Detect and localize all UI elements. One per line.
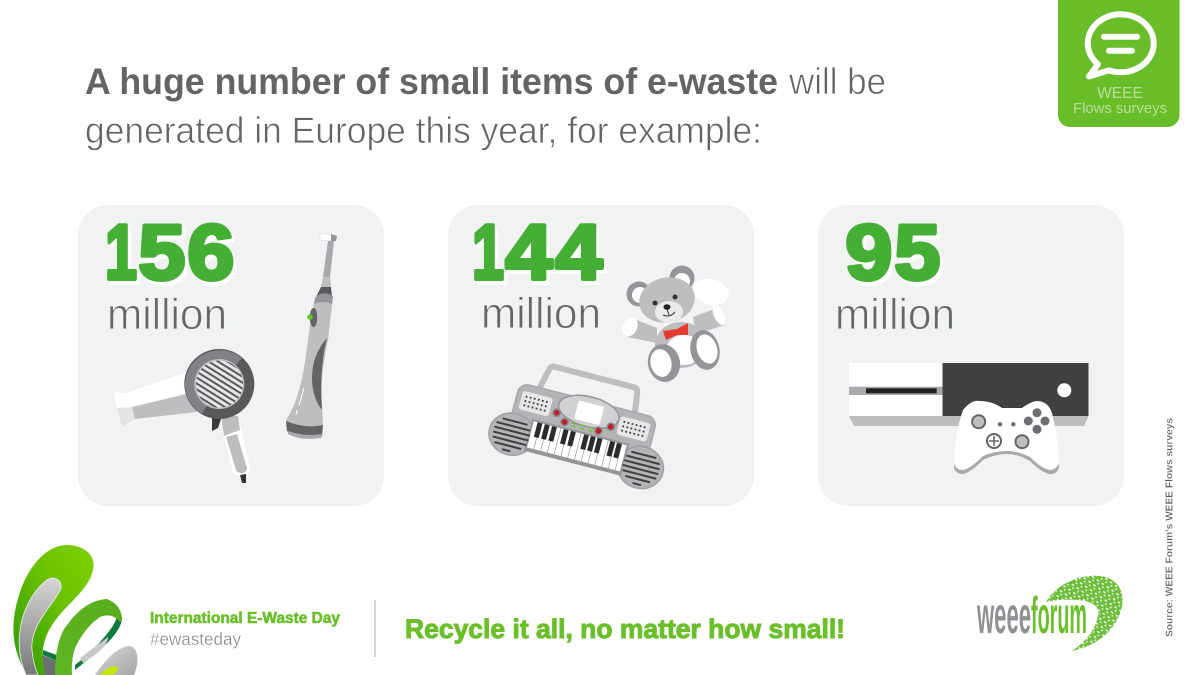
number: 156: 6 [190,212,237,300]
source note: Source: WEEE Forum's WEEE Flows surveys [1164,418,1176,637]
icon: electric toothbrush [286,233,337,439]
icon: game controller [954,401,1059,474]
number: 144: 4 [508,212,555,300]
WEEE Forum logo: weee [977,587,1031,645]
number: 95: 5 [897,212,943,300]
piano keys [527,421,627,471]
side panels [518,391,553,417]
label: million: million [481,289,601,338]
number: 156: 6 [187,208,234,296]
WEEE Forum logo: forum [1031,587,1087,645]
slogan: Recycle it all, no matter how small! [405,614,845,644]
icon: game console [849,363,1088,426]
badge label: WEEE [1097,85,1143,102]
number: 156: 1 [108,212,140,300]
panel: 156 million [78,205,384,506]
label: million: million [835,290,955,339]
number: 156: 5 [141,212,188,300]
number: 95: 5 [894,208,940,296]
WEEE Forum logo [977,576,1123,651]
number: 156: 1 [105,208,137,296]
icon: teddy bear [619,266,732,385]
number: 156: 5 [138,208,185,296]
badge: WEEE Flows surveys [1058,0,1180,127]
number: 95: 9 [845,208,892,296]
number: 144: 4 [558,212,605,300]
icon: hair dryer [113,349,254,483]
label: million: million [107,290,227,339]
bow tie [663,323,688,340]
event name and hashtag: #ewasteday [150,629,241,649]
red buttons [550,408,615,438]
badge label [1073,85,1167,117]
icon: speech bubble [1088,14,1154,76]
speaker grills [490,417,661,488]
heading [85,61,886,151]
number: 144: 4 [555,208,602,296]
panel: 95 million [818,205,1124,506]
display [555,389,623,434]
panel: 144 million [448,205,754,506]
event name and hashtag: International E-Waste Day [150,610,340,627]
badge label: Flows surveys [1073,100,1167,117]
number: 95 [845,208,943,300]
number: 144: 1 [472,208,504,296]
heading: will be [788,61,886,102]
icon: toy keyboard [484,355,682,494]
heading: generated in Europe this year, for example: [85,110,762,151]
number: 144: 1 [475,212,507,300]
E-Waste Day logo [13,545,137,675]
heading: A huge number of small items of e-waste [85,61,778,102]
number: 156 [105,208,237,300]
event name and hashtag [150,610,340,649]
number: 144: 4 [505,208,552,296]
number: 95: 9 [848,212,895,300]
number: 144 [472,208,605,300]
